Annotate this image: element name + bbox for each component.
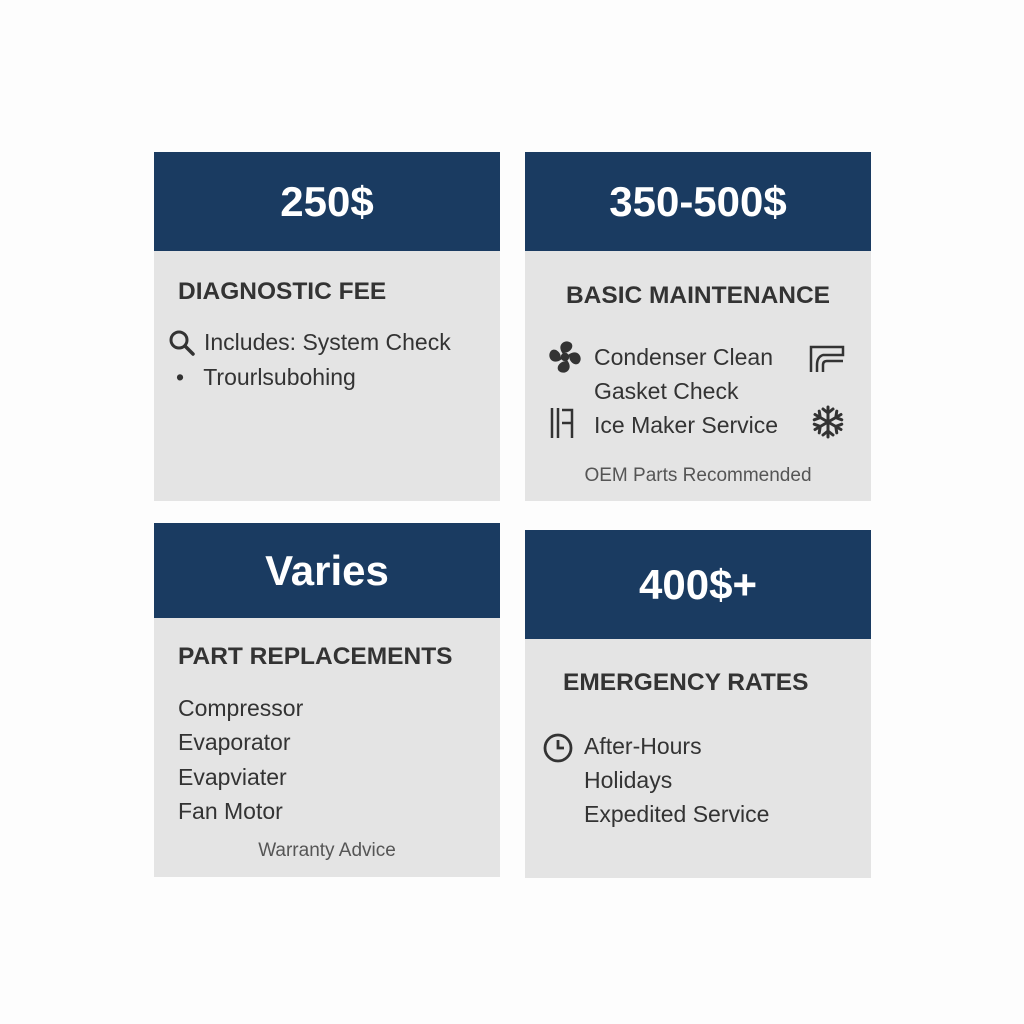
card: diagnostic fee	[154, 152, 500, 501]
header: varies: Varies	[265, 546, 389, 594]
card: part replacements: Evapviater	[178, 764, 287, 790]
header: varies	[154, 523, 500, 618]
header: 400$+: 400$+	[639, 560, 757, 608]
card: basic maintenance: Ice Maker Service	[594, 412, 778, 438]
note: warranty: Warranty Advice	[258, 840, 396, 861]
note: OEM: OEM Parts Recommended	[584, 465, 812, 486]
icon: fan	[549, 341, 581, 373]
icon: snowflake	[812, 406, 844, 438]
card: part replacements	[154, 523, 500, 877]
header: 350-500$: 350-500$	[609, 178, 787, 224]
heading: emergency rates: EMERGENCY RATES	[563, 669, 808, 696]
card: emergency rates: Expedited Service	[584, 801, 769, 827]
card: basic maintenance: Gasket Check	[594, 378, 738, 404]
card: basic maintenance	[525, 152, 871, 501]
text: emergency list: After-Hours	[584, 733, 702, 759]
icon: clock	[544, 734, 572, 762]
heading: part replacements: PART REPLACEMENTS	[178, 643, 453, 670]
card: emergency rates: Holidays	[584, 767, 672, 793]
header: 250$	[154, 152, 500, 251]
icon: magnifier	[170, 330, 195, 356]
text: bullet: • Trourlsubohing	[176, 364, 356, 390]
icon: bars	[550, 408, 574, 438]
icon: pipe	[810, 346, 844, 372]
text: items: Condenser Clean	[594, 344, 773, 370]
header: 400$+	[525, 530, 871, 639]
card: part replacements: Fan Motor	[178, 798, 283, 824]
heading: diagnostic fee: DIAGNOSTIC FEE	[178, 278, 386, 305]
card: part replacements: Evaporator	[178, 729, 291, 755]
text: includes: Includes: System Check	[204, 329, 451, 355]
text: parts list: Compressor	[178, 695, 303, 721]
heading: basic maintenance: BASIC MAINTENANCE	[566, 282, 830, 309]
header: 350-500$	[525, 152, 871, 251]
header: 250$: 250$	[280, 178, 374, 224]
card: emergency rates	[525, 530, 871, 878]
